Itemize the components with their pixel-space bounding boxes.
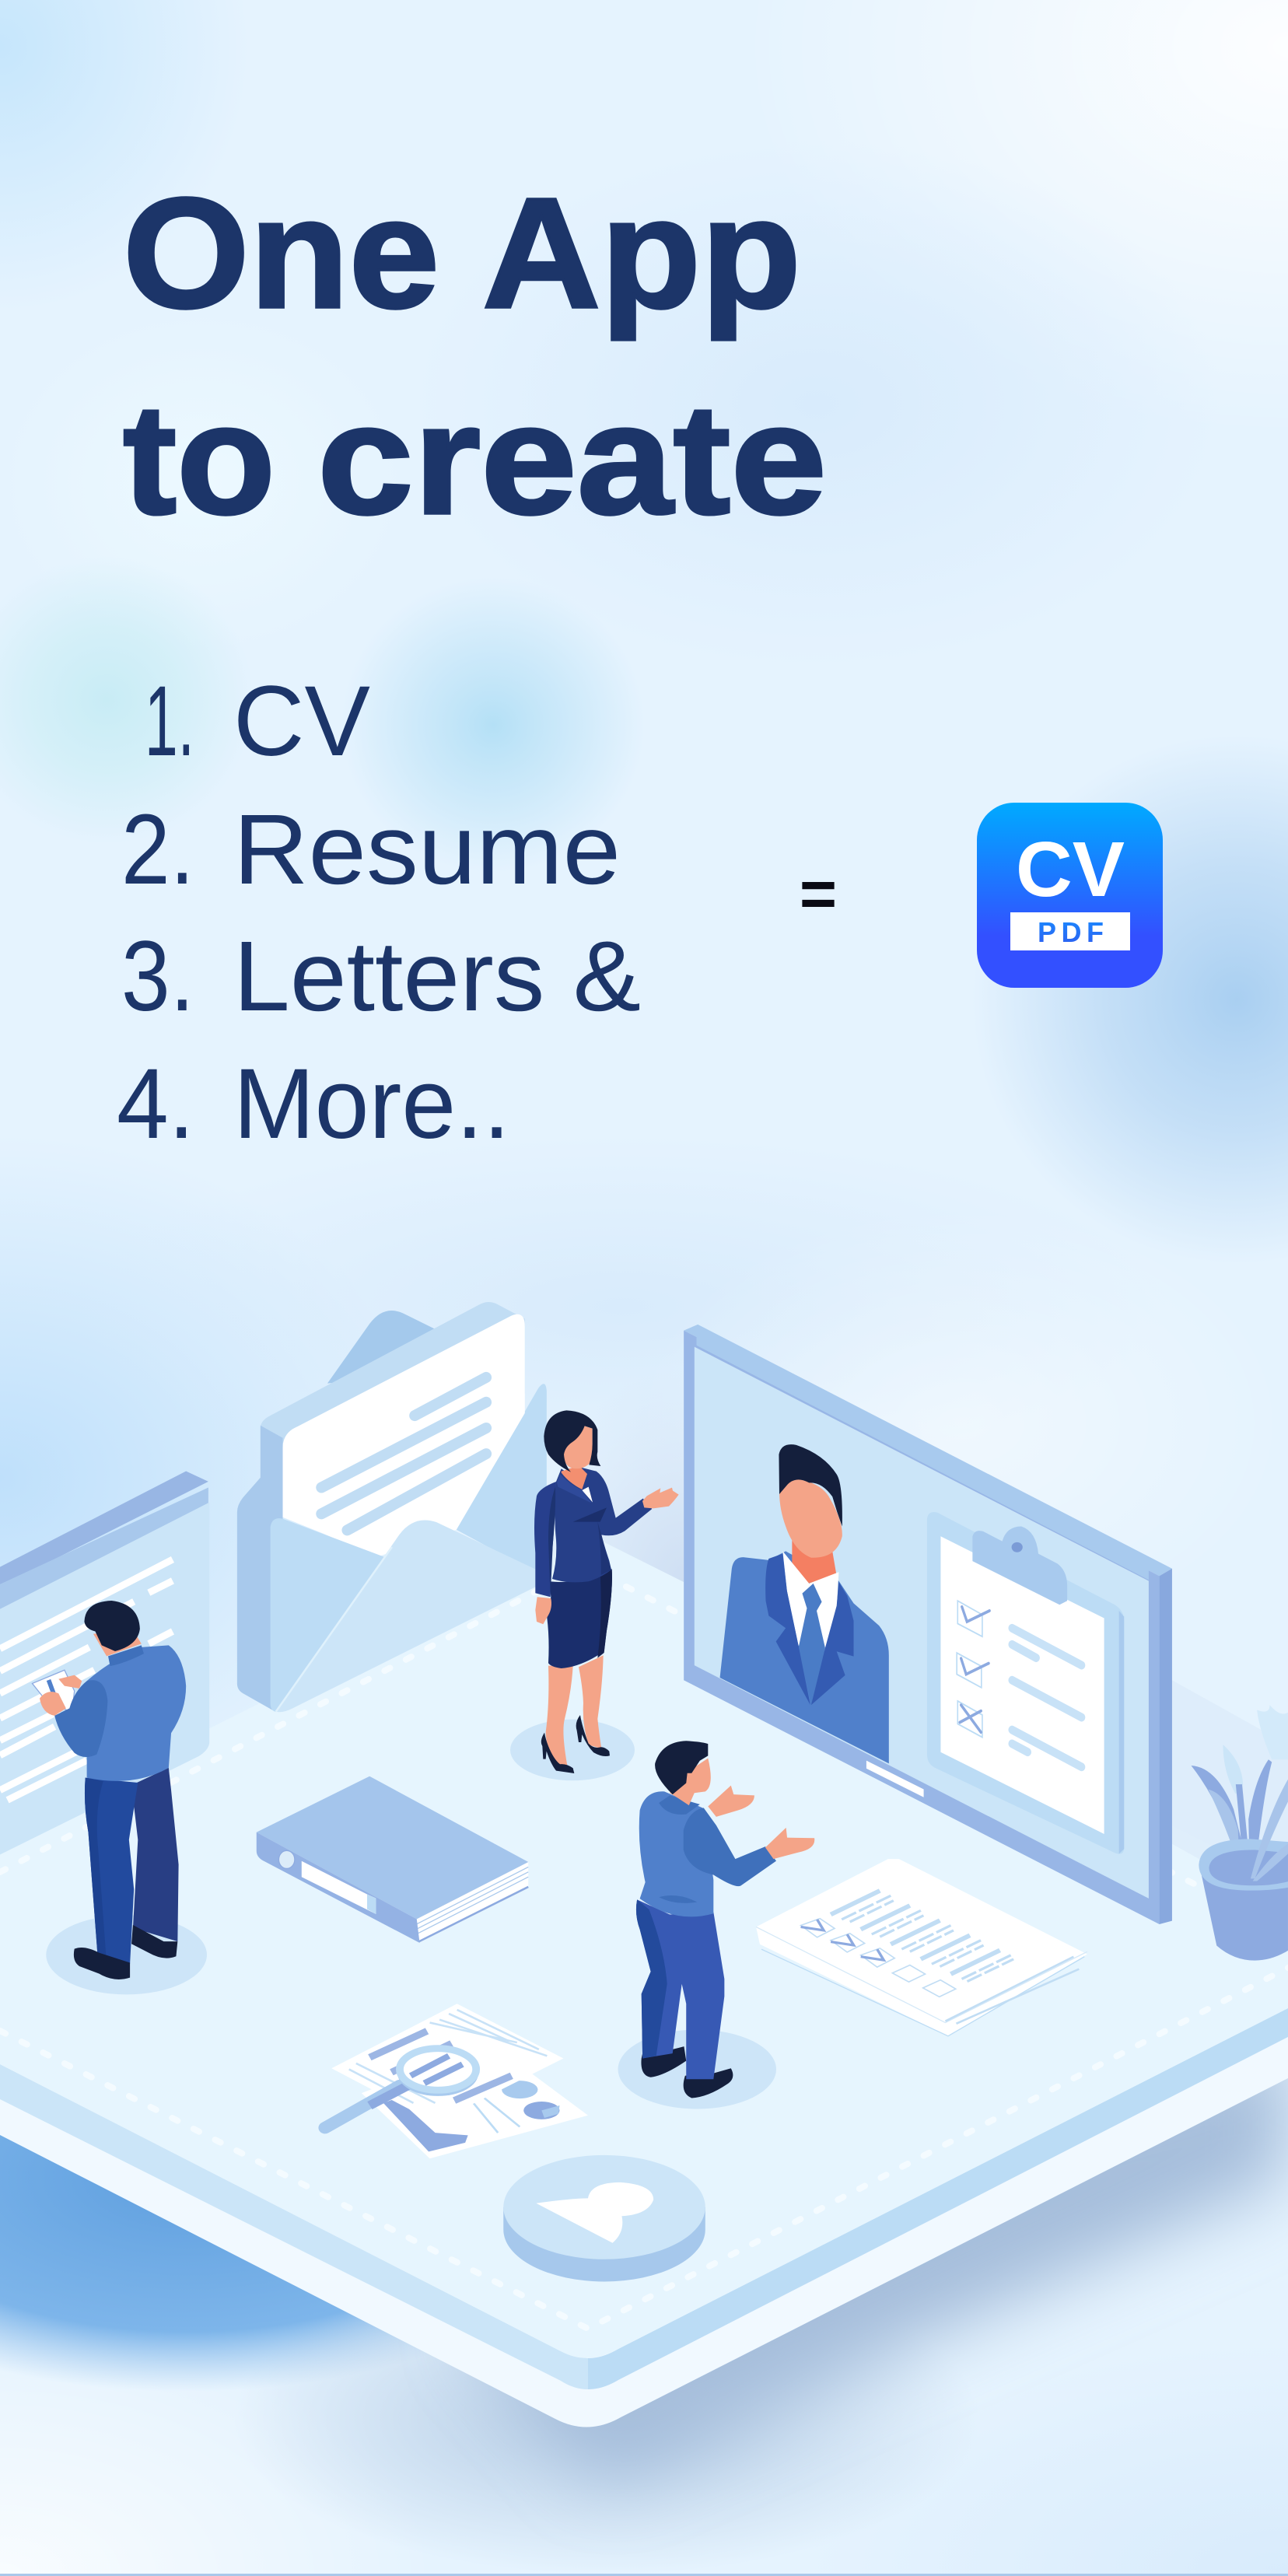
title: create bbox=[317, 371, 827, 547]
numbered list: More.. bbox=[233, 1048, 510, 1160]
numbered list: 4. bbox=[117, 1048, 194, 1160]
dashed border bbox=[0, 1587, 1288, 2329]
man gesturing at monitor bbox=[618, 1741, 814, 2109]
equals sign: = bbox=[800, 857, 837, 930]
isometric illustration bbox=[0, 1302, 1288, 2427]
candidate portrait bbox=[720, 1444, 889, 1763]
title: to bbox=[123, 371, 275, 547]
main monitor with candidate bbox=[684, 1325, 1288, 1924]
numbered list: Resume bbox=[233, 794, 621, 905]
man reading at left monitor bbox=[32, 1601, 207, 1994]
wall shading behind woman bbox=[529, 1369, 684, 1582]
numbered list bbox=[117, 666, 641, 1160]
icon: CV PDF app icon: CV bbox=[1016, 826, 1125, 913]
magnifier over report documents bbox=[325, 2004, 588, 2158]
icon: CV PDF app icon: PDF bbox=[1038, 916, 1104, 948]
left monitor bbox=[0, 1471, 209, 1854]
folder with letter bbox=[237, 1302, 547, 1712]
title bbox=[123, 165, 827, 547]
numbered list: 3. bbox=[121, 921, 194, 1032]
numbered list: CV bbox=[233, 666, 370, 777]
title: One bbox=[123, 165, 439, 341]
plant in pot bbox=[1192, 1705, 1288, 1961]
icon: CV PDF app icon bbox=[977, 803, 1163, 988]
person coin bbox=[503, 2155, 705, 2281]
numbered list: Letters & bbox=[233, 921, 641, 1032]
paper stack with checklist bbox=[756, 1859, 1087, 2036]
clipboard checklist bbox=[927, 1512, 1124, 1854]
numbered list: 2. bbox=[121, 794, 194, 905]
platform bbox=[0, 1536, 1288, 2427]
binder bbox=[257, 1776, 528, 1943]
title: App bbox=[482, 165, 801, 341]
numbered list: 1. bbox=[145, 666, 194, 777]
woman presenting bbox=[510, 1410, 679, 1780]
